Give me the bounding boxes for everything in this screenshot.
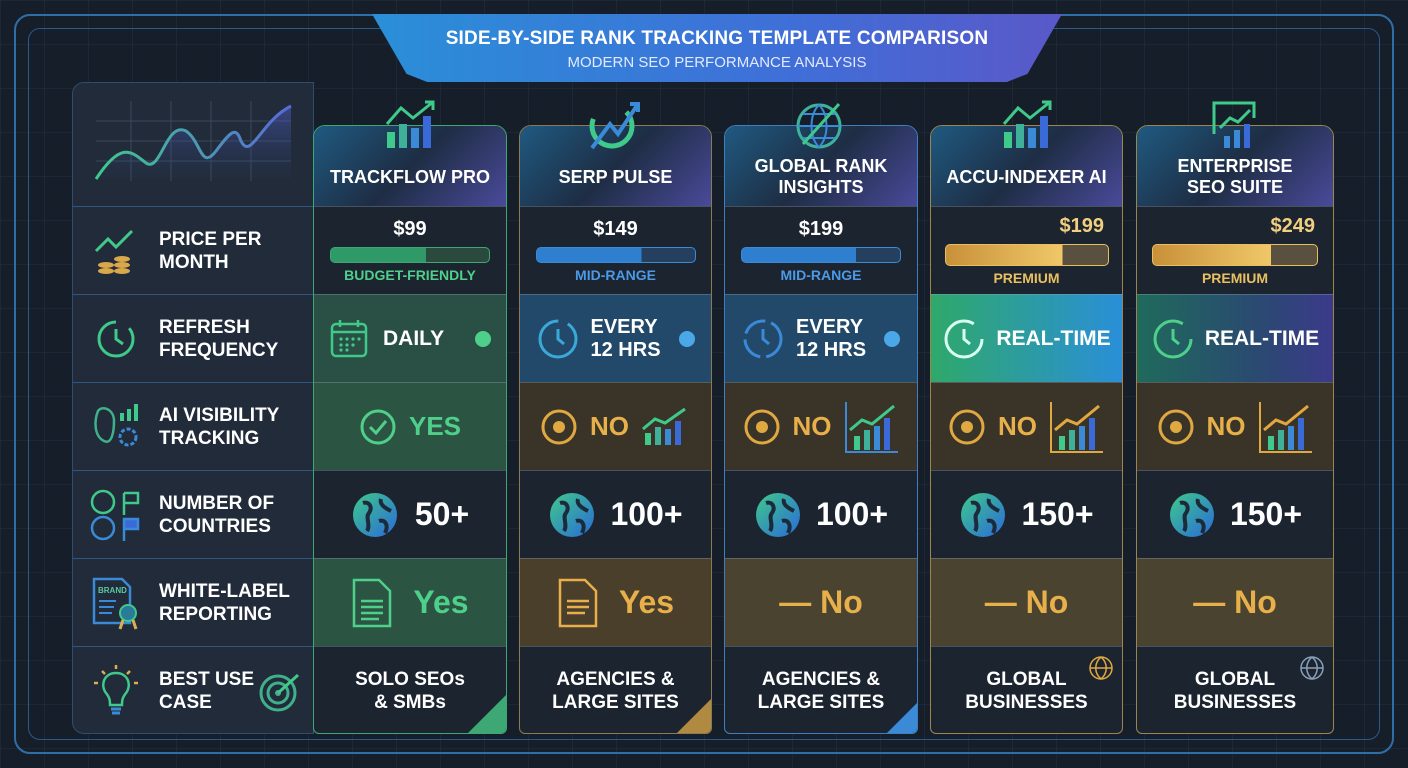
title tab: SIDE-BY-SIDE RANK TRACKING TEMPLATE COMPARISON — [446, 28, 988, 49]
white label cell: Yes — [413, 584, 469, 620]
row label: best use case — [73, 646, 313, 734]
row label: price: MONTH — [159, 252, 229, 272]
panel: enterprise seo suite: PREMIUM — [1202, 270, 1268, 286]
icon: trackflow header — [386, 100, 434, 148]
row label: best use case: CASE — [159, 692, 212, 712]
panel: accu-indexer ai: 150+ — [1021, 496, 1094, 532]
row label: white label: WHITE-LABEL — [159, 580, 290, 602]
row label: refresh: REFRESH — [159, 316, 250, 338]
row label: white label: BRAND — [98, 586, 127, 594]
icon: accu-indexer header — [1003, 100, 1052, 148]
panel: serp pulse: 100+ — [610, 496, 683, 532]
panel: accu-indexer ai: ACCU-INDEXER AI — [946, 166, 1107, 186]
countries cell — [314, 470, 506, 558]
panel: enterprise seo suite — [1136, 125, 1334, 734]
panel: accu-indexer ai: NO — [998, 411, 1037, 441]
panel: global rank insights — [724, 125, 918, 734]
panel: global rank insights: NO — [792, 411, 832, 441]
panel: enterprise seo suite: BUSINESSES — [1174, 692, 1296, 712]
panel: accu-indexer ai: — No — [985, 584, 1068, 620]
panel: global rank insights: 12 HRS — [796, 338, 866, 360]
panel: serp pulse: AGENCIES & — [556, 668, 675, 690]
price cell: BUDGET-FRIENDLY — [344, 267, 476, 283]
icon: header line chart — [94, 101, 292, 181]
panel: trackflow pro — [313, 125, 507, 734]
panel: enterprise seo suite: REAL-TIME — [1205, 326, 1319, 350]
header: TRACKFLOW PRO — [330, 166, 490, 186]
panel: enterprise seo suite: — No — [1193, 584, 1277, 620]
row label: countries: COUNTRIES — [159, 516, 271, 536]
panel: serp pulse: $149 — [593, 218, 638, 240]
panel: accu-indexer ai: REAL-TIME — [996, 326, 1111, 350]
row label: best use case: BEST USE — [159, 668, 254, 690]
panel: row labels — [72, 82, 314, 734]
panel: global rank insights: EVERY — [796, 316, 863, 338]
panel: serp pulse: LARGE SITES — [552, 692, 679, 712]
panel: accu-indexer ai: $199 — [1060, 215, 1104, 237]
panel: global rank insights: 100+ — [816, 496, 888, 532]
refresh cell: DAILY — [383, 326, 444, 350]
row label: price: PRICE PER — [159, 228, 261, 250]
panel: enterprise seo suite: 150+ — [1230, 496, 1302, 532]
white label cell — [314, 558, 506, 646]
panel: enterprise seo suite: NO — [1206, 411, 1246, 441]
panel: enterprise seo suite: SEO SUITE — [1187, 177, 1283, 197]
best use cell — [314, 646, 506, 734]
icon: serp pulse header — [590, 102, 640, 150]
countries cell: 50+ — [415, 496, 469, 532]
panel: serp pulse: EVERY — [590, 316, 658, 338]
panel: accu-indexer ai — [930, 125, 1123, 734]
panel: serp pulse: SERP PULSE — [559, 166, 672, 186]
panel: global rank insights: LARGE SITES — [758, 692, 884, 712]
price cell — [314, 206, 506, 294]
row label: ai visibility — [73, 382, 313, 470]
best use cell: & SMBs — [374, 692, 446, 712]
refresh cell — [314, 294, 506, 382]
header — [314, 126, 506, 206]
row label: countries — [73, 470, 313, 558]
title tab: MODERN SEO PERFORMANCE ANALYSIS — [568, 54, 866, 71]
panel: accu-indexer ai: BUSINESSES — [965, 692, 1088, 712]
ai cell — [314, 382, 506, 470]
panel: serp pulse: NO — [590, 411, 629, 441]
row label: ai visibility: AI VISIBILITY — [159, 404, 279, 426]
panel: accu-indexer ai: PREMIUM — [993, 270, 1060, 286]
panel: serp pulse: MID-RANGE — [575, 267, 656, 283]
panel: global rank insights: INSIGHTS — [778, 177, 864, 197]
panel: global rank insights: MID-RANGE — [781, 267, 861, 283]
row label: countries: NUMBER OF — [159, 492, 274, 514]
row label: price — [73, 206, 313, 294]
panel: global rank insights: — No — [779, 584, 863, 620]
row label: ai visibility: TRACKING — [159, 428, 259, 448]
best use cell: SOLO SEOs — [355, 668, 465, 690]
row label: white label — [73, 558, 313, 646]
panel: serp pulse: Yes — [619, 584, 674, 620]
panel: serp pulse: 12 HRS — [590, 338, 661, 360]
title tab — [372, 14, 1062, 82]
row label: white label: REPORTING — [159, 604, 272, 624]
icon: global rank header — [796, 103, 842, 148]
icon: enterprise header — [1212, 102, 1256, 148]
panel: global rank insights: GLOBAL RANK — [755, 156, 887, 176]
panel: enterprise seo suite: $249 — [1270, 215, 1315, 237]
ai cell: YES — [409, 411, 461, 441]
panel: enterprise seo suite: GLOBAL — [1195, 668, 1275, 690]
panel: accu-indexer ai: GLOBAL — [986, 668, 1067, 690]
price cell: $99 — [393, 218, 427, 240]
panel: global rank insights: AGENCIES & — [762, 668, 880, 690]
panel: serp pulse — [519, 125, 712, 734]
panel: enterprise seo suite: ENTERPRISE — [1177, 156, 1293, 176]
panel: global rank insights: $199 — [799, 218, 843, 240]
row label: refresh — [73, 294, 313, 382]
row label: refresh: FREQUENCY — [159, 340, 278, 360]
